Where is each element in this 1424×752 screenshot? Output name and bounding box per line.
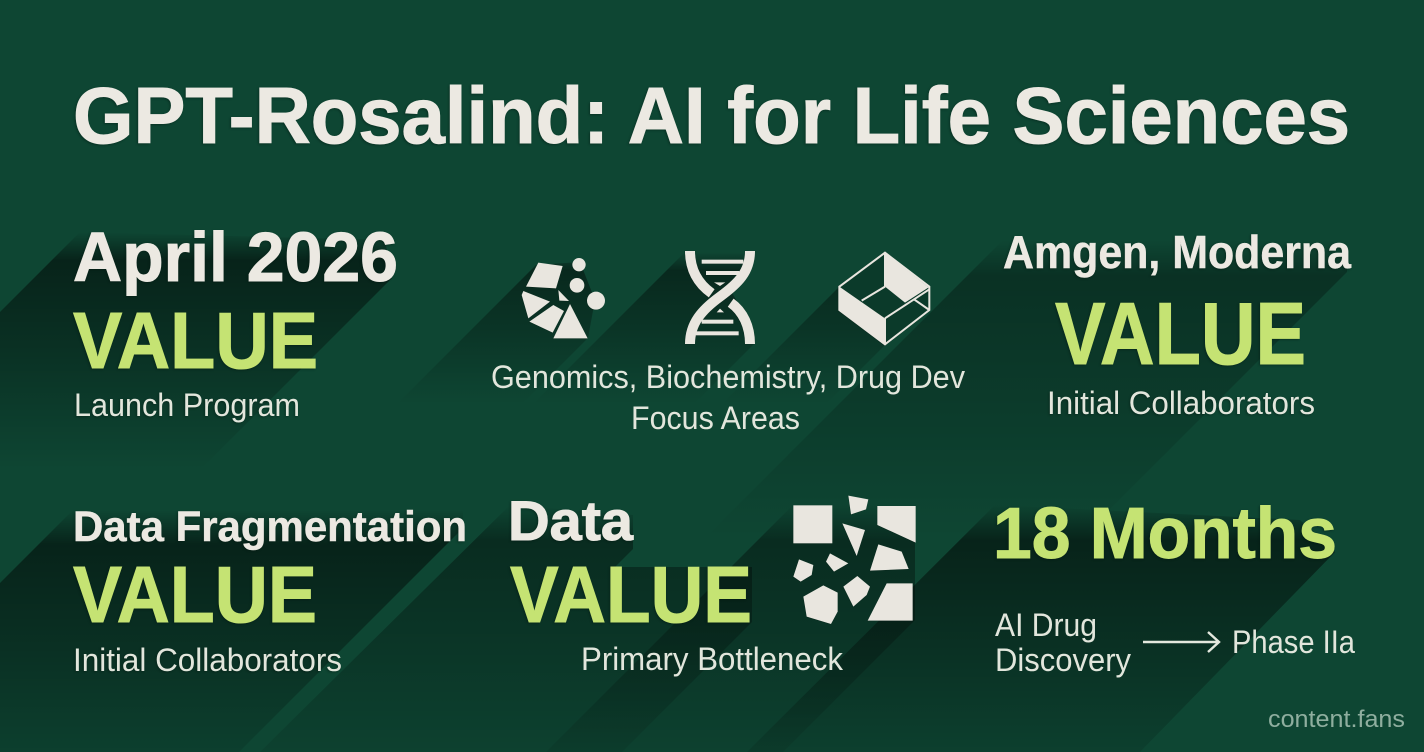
panel: launch program [73,218,398,423]
launch value: VALUE [73,296,318,385]
collaborators caption: Initial Collaborators [1047,385,1315,421]
panel: focus areas [491,251,965,436]
timeline end label: Phase IIa [1232,624,1355,660]
bottleneck value: VALUE [510,550,752,639]
collaborators value: VALUE [1055,284,1306,383]
arrow [1143,632,1219,652]
icon: DNA helix [690,251,750,344]
watermark: content.fans [1268,706,1405,733]
title: GPT-Rosalind: AI for Life Sciences [73,71,1350,160]
panel: primary bottleneck [508,489,916,677]
fragmentation heading: Data Fragmentation [73,503,467,551]
timeline value: 18 Months [993,494,1337,574]
timeline start label: Discovery [995,642,1131,678]
collaborators heading: Amgen, Moderna [1003,226,1351,278]
panel: 18 months timeline [993,494,1355,678]
icon: open box [839,253,929,344]
fragmentation value: VALUE [73,550,317,639]
focus areas value: Genomics, Biochemistry, Drug Dev [491,359,965,395]
bottleneck heading: Data [508,489,634,552]
focus areas caption: Focus Areas [631,400,800,436]
panel: data fragmentation [73,503,467,678]
long diagonal shadows [0,232,1347,752]
launch caption: Launch Program [74,387,300,423]
panel: collaborators [1003,226,1351,421]
icon: molecule fragments [522,258,605,338]
timeline start label: AI Drug [995,607,1097,643]
launch date heading: April 2026 [73,218,398,296]
icon: scattered fragments [793,496,916,624]
fragmentation caption: Initial Collaborators [73,642,342,678]
bottleneck caption: Primary Bottleneck [581,641,844,677]
